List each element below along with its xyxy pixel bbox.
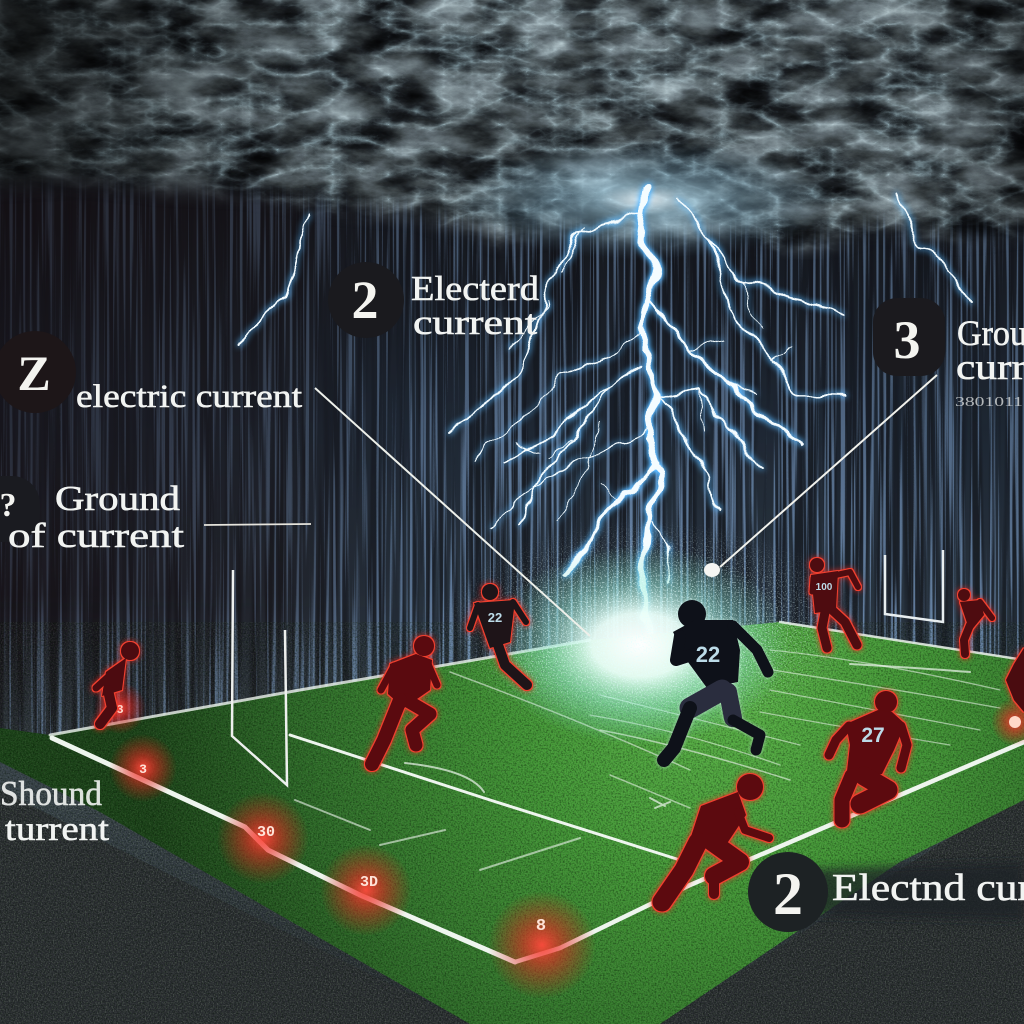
callout 2: electric current bottom xyxy=(748,852,1024,932)
callout 7: electric current left: Z xyxy=(17,345,51,401)
red glow marker 3: 30 xyxy=(257,824,275,841)
rain streaks xyxy=(0,170,1024,760)
callout: shound turrent xyxy=(0,774,110,848)
football field xyxy=(0,622,1024,1024)
red glow marker 1 xyxy=(94,682,146,734)
player: sprinting left xyxy=(372,636,437,764)
player: red cropped right edge xyxy=(1006,648,1024,712)
player: running number 22 upper: 22 xyxy=(488,610,502,625)
callout 2: electric current upper: 2 xyxy=(352,270,378,330)
callout 2: electric current upper xyxy=(328,262,540,342)
red glow marker 4: 3D xyxy=(360,874,378,891)
red glow marker 2 xyxy=(109,734,177,802)
leader line: electric current to strike xyxy=(315,388,590,636)
player: central running number 22 in black xyxy=(664,600,768,760)
red glow marker 2: 3 xyxy=(139,762,147,777)
ground impact flash xyxy=(440,520,870,745)
callout 3: ground current right: 3 xyxy=(894,310,920,370)
red glow marker 1: 3 xyxy=(116,703,124,717)
red glow marker 4 xyxy=(320,844,412,936)
goalpost: left xyxy=(232,570,287,785)
player: red number 27 xyxy=(829,691,907,820)
goalpost: right xyxy=(885,550,943,622)
asphalt surround xyxy=(0,790,1024,1024)
leader line: ground current with end dot xyxy=(704,375,937,577)
red glow marker 5 xyxy=(488,891,596,999)
callout 3: ground current right: curr xyxy=(956,347,1024,387)
callout 7: electric current left: electric current xyxy=(76,379,302,415)
player: number 100 far right: 100 xyxy=(816,582,833,593)
callout: ground of current: of current xyxy=(8,516,184,555)
lightning bolt with branches xyxy=(240,190,972,640)
callout: ground of current xyxy=(0,476,184,555)
callout 2: electric current bottom: Electnd cur xyxy=(832,867,1024,909)
player: red far background right xyxy=(958,589,992,654)
callout 3: ground current right: 3801011 xyxy=(955,395,1023,410)
callout 2: electric current upper: Electerd xyxy=(411,269,540,308)
red glow marker 3 xyxy=(217,792,309,884)
storm clouds xyxy=(0,0,1024,257)
field markings xyxy=(50,622,1024,962)
player: crouched far left xyxy=(96,642,139,724)
callout: ground of current: Ground xyxy=(55,479,181,518)
red glow marker 6 xyxy=(991,698,1024,746)
red glow marker 5: 8 xyxy=(536,917,546,936)
player: central running number 22 in black: 22 xyxy=(696,642,720,667)
callout: ground of current: ? xyxy=(0,487,16,524)
leader line: ground of current xyxy=(204,524,311,525)
callout 2: electric current upper: current xyxy=(413,303,537,342)
player: number 100 far right xyxy=(810,558,858,648)
callout: shound turrent: Shound xyxy=(0,774,102,813)
callout 3: ground current right xyxy=(873,298,1024,410)
callout 2: electric current bottom: 2 xyxy=(773,861,803,927)
player: red foreground runner xyxy=(662,774,769,902)
player: red number 27: 27 xyxy=(861,724,885,747)
callout: shound turrent: turrent xyxy=(5,811,110,848)
callout 7: electric current left xyxy=(0,331,302,415)
player: running number 22 upper xyxy=(470,584,527,685)
